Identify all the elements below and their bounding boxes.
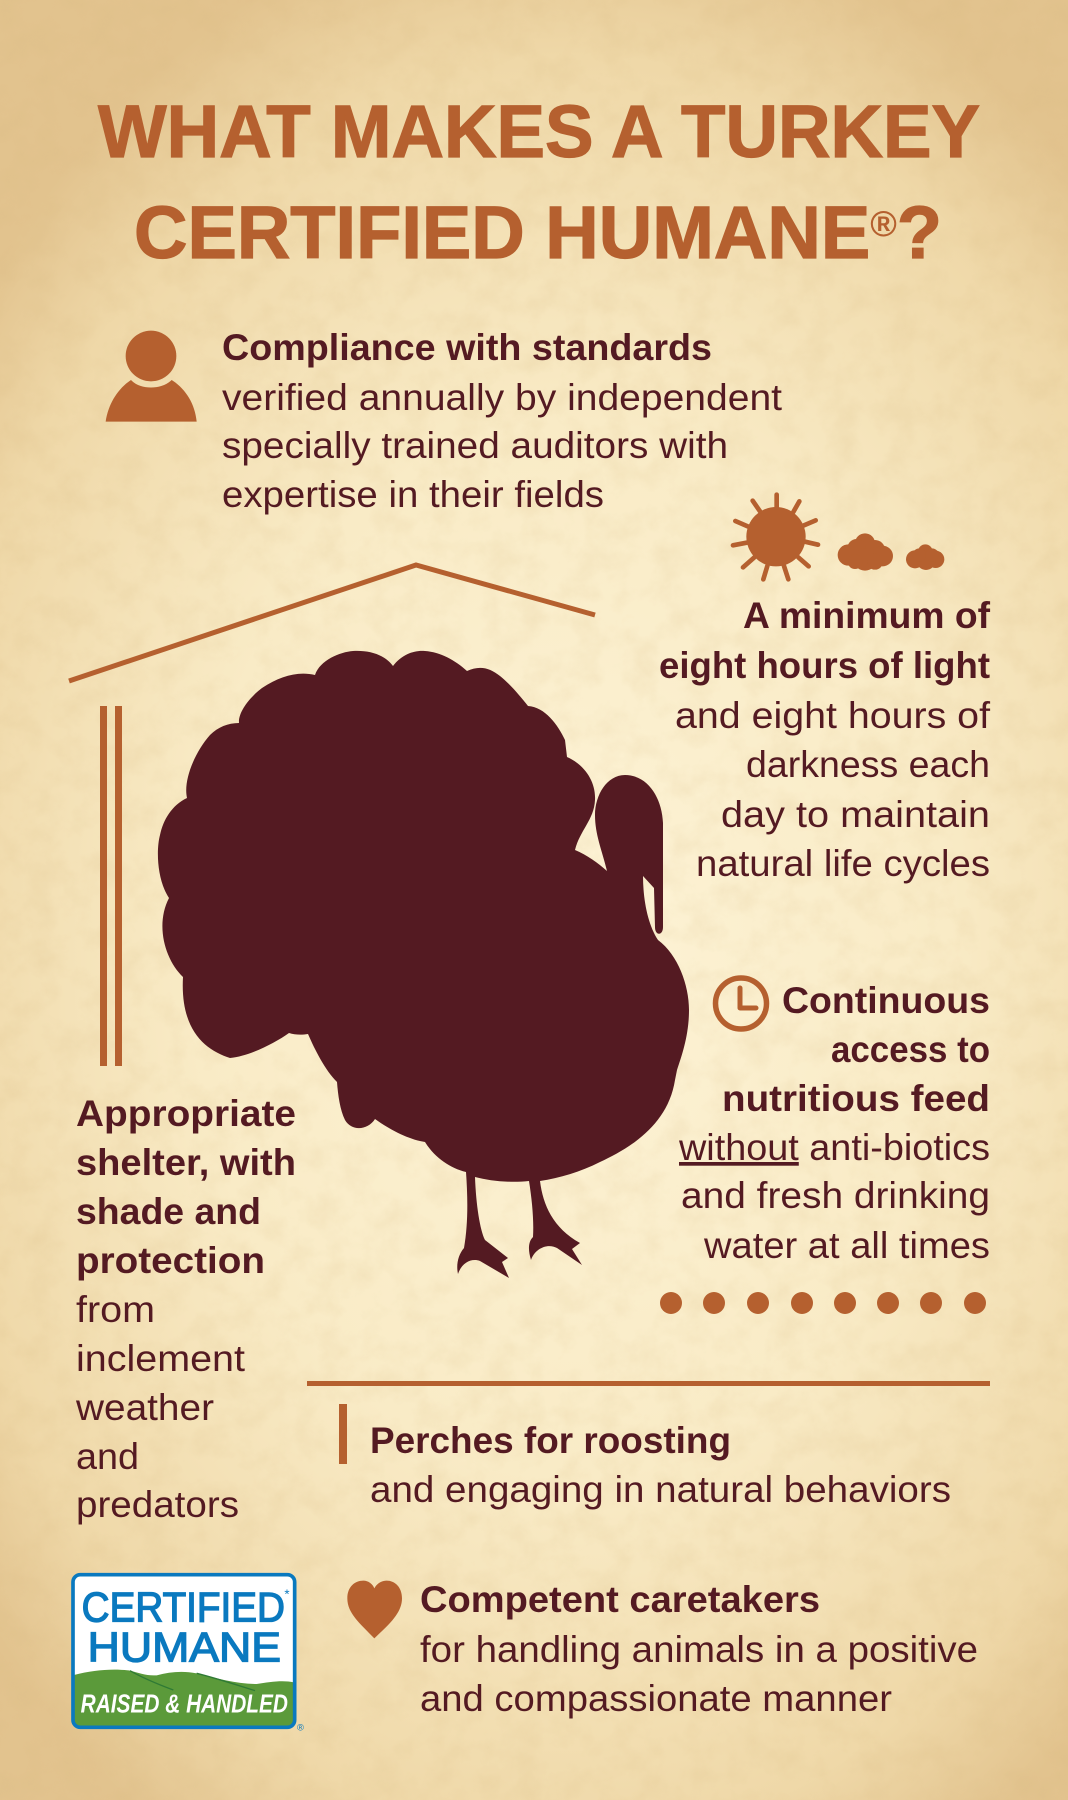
icon: clock — [716, 978, 766, 1029]
icon: heart — [347, 1581, 402, 1638]
text block: feed and water: and fresh drinking — [681, 1175, 990, 1216]
text block: light and darkness: and eight hours of — [675, 695, 991, 736]
dotted row — [660, 1292, 986, 1314]
text block: competent caretakers: and compassionate manner — [420, 1678, 892, 1719]
logo: Certified Humane Raised and Handled: RAISED & HANDLED — [81, 1689, 288, 1719]
text block: competent caretakers: for handling animals in a positive — [420, 1629, 978, 1670]
text block: feed and water: nutritious feed — [722, 1078, 990, 1119]
text block: competent caretakers — [420, 1579, 978, 1719]
text block: feed and water: water at all times — [703, 1225, 990, 1266]
text block: appropriate shelter: weather — [75, 1387, 214, 1428]
text block: feed and water: without anti-biotics — [678, 1127, 990, 1168]
text block: light and darkness — [659, 595, 991, 884]
icon: auditor person — [106, 331, 197, 422]
title: CERTIFIED HUMANE — [134, 191, 870, 274]
icon: small cloud — [906, 544, 944, 570]
text block: compliance with standards: specially trained auditors with — [222, 425, 728, 466]
text block: appropriate shelter: from — [76, 1289, 155, 1330]
text block: appropriate shelter: predators — [76, 1484, 239, 1525]
text block: appropriate shelter: shelter, with — [76, 1142, 296, 1183]
text block: appropriate shelter — [75, 1093, 296, 1525]
icon: barn roof — [69, 565, 595, 681]
text block: compliance with standards — [222, 327, 783, 515]
turkey silhouette — [158, 651, 689, 1278]
text block: compliance with standards: verified annually by independent — [222, 377, 783, 418]
text block: perches: and engaging in natural behaviors — [370, 1469, 951, 1510]
title: WHAT MAKES A TURKEY — [98, 90, 980, 173]
text block: light and darkness: natural life cycles — [696, 843, 990, 884]
logo: Certified Humane Raised and Handled: HUMANE — [88, 1625, 281, 1671]
text block: appropriate shelter: inclement — [76, 1338, 246, 1379]
text block: feed and water — [678, 980, 990, 1266]
title — [98, 90, 980, 274]
text block: appropriate shelter: shade and — [76, 1191, 261, 1232]
icon: sun — [733, 495, 818, 579]
logo: Certified Humane Raised and Handled: * — [284, 1586, 290, 1601]
text block: compliance with standards: Compliance with standards — [222, 327, 712, 368]
icon: large cloud — [838, 533, 893, 571]
text block: competent caretakers: Competent caretakers — [420, 1579, 820, 1620]
icon: sun and clouds — [733, 495, 944, 579]
title: ? — [897, 191, 942, 274]
title: ® — [870, 203, 897, 244]
horizontal rule — [307, 1381, 990, 1386]
text block: light and darkness: darkness each — [746, 744, 990, 785]
text block: compliance with standards: expertise in their fields — [222, 474, 604, 515]
text block: appropriate shelter: Appropriate — [76, 1093, 296, 1134]
logo: Certified Humane Raised and Handled: ® — [297, 1723, 304, 1733]
logo: Certified Humane Raised and Handled: CERTIFIED — [82, 1584, 285, 1630]
text block: perches — [370, 1420, 951, 1510]
text block: light and darkness: eight hours of light — [659, 645, 990, 686]
icon: perch bar — [339, 1404, 347, 1464]
text block: feed and water: Continuous — [782, 980, 990, 1021]
text block: appropriate shelter: protection — [76, 1240, 265, 1281]
text block: feed and water: access to — [831, 1029, 990, 1070]
text block: perches: Perches for roosting — [370, 1420, 731, 1461]
text block: light and darkness: day to maintain — [721, 794, 990, 835]
text block: light and darkness: A minimum of — [743, 595, 991, 636]
text block: appropriate shelter: and — [76, 1436, 139, 1477]
logo: Certified Humane Raised and Handled — [73, 1575, 304, 1733]
icon: barn wall posts — [100, 706, 122, 1066]
